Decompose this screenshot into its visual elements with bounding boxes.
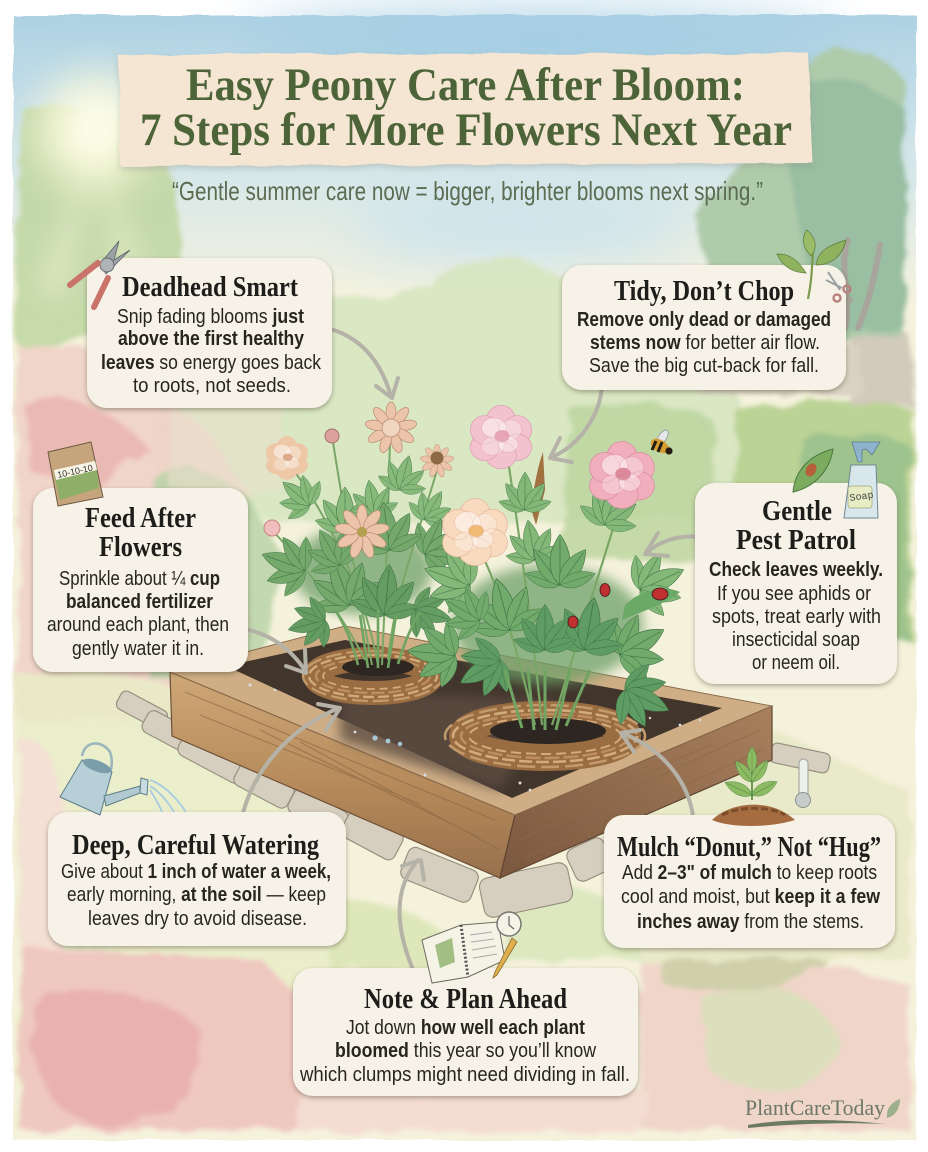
panel: gentle pest patrol: Gentle [762, 495, 832, 527]
icon: fertilizer bag: 10-10-10 [56, 463, 94, 480]
panel: gentle pest patrol: spots, treat early with [712, 605, 881, 628]
logo: PlantCareToday [745, 1095, 900, 1128]
panel: deep, careful watering: early morning, at the soil — keep [67, 883, 326, 906]
icon: pruners [70, 241, 130, 307]
arrow: watering to soil [241, 704, 340, 821]
panel: tidy, don't chop: stems now for better air flow. [590, 331, 820, 354]
title banner: Easy Peony Care After Bloom: [186, 59, 745, 111]
panel: note and plan ahead: Jot down how well each plant [346, 1016, 585, 1039]
peony plant: right, fresh blooms [404, 405, 699, 742]
peony plant: left, faded blooms [251, 402, 481, 668]
icon: seedling, mulch and thermometer [712, 747, 810, 826]
panel: deep, careful watering [48, 812, 346, 946]
arrows [238, 326, 716, 972]
icon: garden journal, clock and pencil [422, 912, 521, 983]
panel: mulch donut not hug [604, 815, 895, 948]
panel: tidy, don't chop: Remove only dead or damaged [577, 308, 831, 331]
title banner [119, 53, 813, 166]
raised garden bed [170, 626, 772, 878]
panel: note and plan ahead: Note & Plan Ahead [364, 983, 567, 1015]
panel: feed after flowers: around each plant, then [47, 613, 229, 636]
arrow: note to bed [400, 860, 424, 972]
panel: deadhead smart [87, 258, 332, 408]
panel: note and plan ahead [293, 968, 638, 1096]
icon: leaf with beetle and spray bottle [793, 442, 880, 518]
panel: feed after flowers: gently water it in. [72, 637, 204, 660]
panel: deadhead smart: leaves so energy goes back [101, 351, 322, 374]
panel: deadhead smart: Deadhead Smart [122, 271, 298, 303]
icon: leaf with beetle and spray bottle: Soap [849, 491, 874, 505]
panel: mulch donut not hug: Add 2–3" of mulch to keep roots [622, 861, 877, 884]
panel: note and plan ahead: bloomed this year so you’ll know [335, 1039, 596, 1062]
panel: feed after flowers: Flowers [99, 531, 182, 563]
icon: fertilizer bag [48, 442, 103, 506]
arrow: tidy to dead stem [550, 386, 602, 462]
panel: deep, careful watering: Deep, Careful Watering [72, 829, 319, 861]
arrow: feed to soil [238, 628, 306, 673]
mulch ring: right plant [445, 705, 645, 767]
panel: tidy, don't chop [562, 265, 846, 390]
icon: sprig and scissors [777, 230, 850, 302]
panel: deadhead smart: above the first healthy [118, 327, 305, 350]
title banner: 7 Steps for More Flowers Next Year [140, 104, 792, 156]
stone path [114, 689, 831, 919]
icon: bee [648, 428, 673, 456]
panel: gentle pest patrol: insecticidal soap [732, 628, 860, 651]
panel: feed after flowers: Sprinkle about ¼ cup [59, 567, 220, 590]
panel: mulch donut not hug: cool and moist, but keep it a few [621, 885, 880, 908]
panel: deep, careful watering: leaves dry to avoid disease. [88, 907, 307, 930]
arrow: deadhead to spent bloom [318, 326, 398, 398]
arrow: mulch to ring [621, 730, 694, 826]
tree trunk [815, 240, 880, 328]
panel: deep, careful watering: Give about 1 inch of water a week, [61, 860, 331, 883]
panel: gentle pest patrol: If you see aphids or [717, 582, 871, 605]
panel: feed after flowers: Feed After [85, 502, 196, 534]
mulch ring: left plant [303, 651, 443, 701]
panel: gentle pest patrol: Pest Patrol [736, 524, 856, 556]
panel: note and plan ahead: which clumps might need dividing in fall. [299, 1063, 630, 1086]
panel: gentle pest patrol [695, 483, 897, 684]
subtitle: “Gentle summer care now = bigger, brighter blooms next spring.” [172, 176, 763, 206]
panel: deadhead smart: Snip fading blooms just [117, 305, 304, 328]
panel: tidy, don't chop: Tidy, Don’t Chop [614, 275, 794, 307]
arrow: pest to foliage [645, 533, 716, 556]
panel: gentle pest patrol: Check leaves weekly. [709, 558, 883, 581]
panel: tidy, don't chop: Save the big cut-back for fall. [589, 354, 819, 377]
panel: deadhead smart: to roots, not seeds. [133, 374, 291, 397]
logo: PlantCareToday: PlantCareToday [745, 1095, 885, 1120]
panel: feed after flowers: balanced fertilizer [66, 590, 213, 613]
icon: watering can [60, 743, 186, 815]
panel: gentle pest patrol: or neem oil. [752, 651, 840, 674]
panel: mulch donut not hug: inches away from the stems. [637, 910, 864, 933]
panel: feed after flowers [33, 488, 248, 672]
